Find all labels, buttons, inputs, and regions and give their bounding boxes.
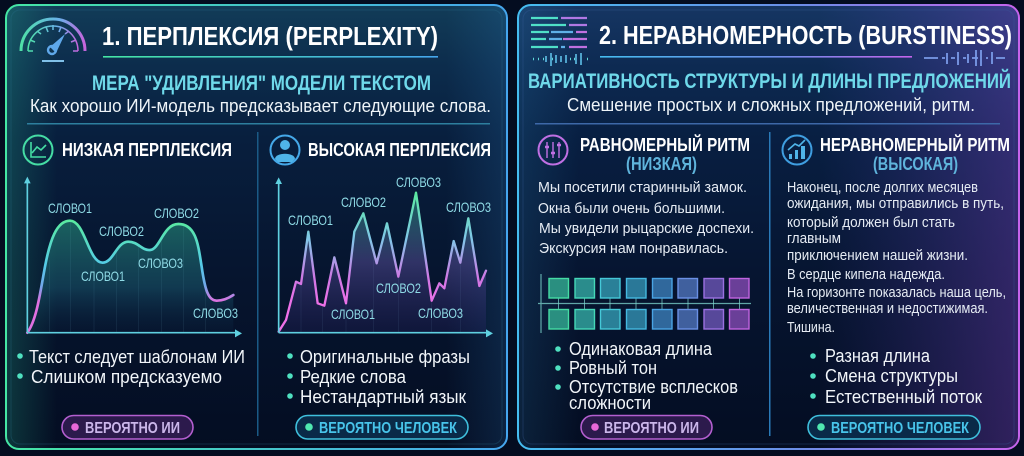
list: uneven rhythm traits: Естественный поток xyxy=(825,386,983,407)
text block: uneven rhythm sample: приключением нашей жизни. xyxy=(787,248,968,264)
chart: high perplexity spikes: СЛОВО3 xyxy=(446,199,491,215)
chart: low perplexity curve: СЛОВО3 xyxy=(193,305,238,321)
list: low perplexity traits xyxy=(17,346,245,387)
text block: even rhythm sample: Экскурсия нам понравилась. xyxy=(539,240,728,257)
chart: high perplexity spikes: СЛОВО1 xyxy=(288,212,333,228)
text block: uneven rhythm sample: который должен был стать xyxy=(787,215,955,231)
list: uneven rhythm traits: Смена структуры xyxy=(825,365,958,386)
badge: likely human: ВЕРОЯТНО ЧЕЛОВЕК xyxy=(319,420,457,437)
list: low perplexity traits: Слишком предсказуемо xyxy=(31,366,222,387)
heading: even rhythm: РАВНОМЕРНЫЙ РИТМ xyxy=(580,134,750,155)
list: uneven rhythm traits xyxy=(810,345,983,407)
description: perplexity: Как хорошо ИИ-модель предсказывает следующие слова. xyxy=(30,96,491,116)
text block: uneven rhythm sample: главным xyxy=(787,231,841,247)
text block: uneven rhythm sample: Тишина. xyxy=(787,320,835,336)
text block: even rhythm sample: Окна были очень большими. xyxy=(538,200,725,217)
chart: uniform sentence blocks xyxy=(538,274,751,333)
text block: uneven rhythm sample: В сердце кипела надежда. xyxy=(787,267,945,283)
chart: high perplexity spikes xyxy=(275,174,493,337)
chart: low perplexity curve: СЛОВО2 xyxy=(99,223,144,239)
heading: even rhythm: (НИЗКАЯ) xyxy=(626,154,697,174)
badge: likely AI: ВЕРОЯТНО ИИ xyxy=(85,420,180,437)
list: even rhythm traits xyxy=(555,338,738,413)
list: even rhythm traits: Отсутствие всплесков xyxy=(569,376,738,397)
list: even rhythm traits: сложности xyxy=(569,392,651,413)
list: high perplexity traits: Редкие слова xyxy=(300,366,407,387)
text block: even rhythm sample: Мы посетили старинный замок. xyxy=(538,179,747,196)
badge: likely human xyxy=(808,416,980,439)
heading: high perplexity: ВЫСОКАЯ ПЕРПЛЕКСИЯ xyxy=(308,140,491,160)
heading: even rhythm xyxy=(580,134,750,174)
icon: growth bars xyxy=(782,136,812,164)
icon: sliders xyxy=(538,136,568,164)
badge: likely human: ВЕРОЯТНО ЧЕЛОВЕК xyxy=(831,420,969,437)
chart: low perplexity curve xyxy=(24,177,242,337)
heading: uneven rhythm xyxy=(820,134,1010,174)
icon: high perplexity person xyxy=(270,136,300,164)
icon: text rhythm lines xyxy=(531,18,588,66)
list: uneven rhythm traits: Разная длина xyxy=(825,345,931,366)
list: low perplexity traits: Текст следует шаблонам ИИ xyxy=(29,346,245,367)
chart: high perplexity spikes: СЛОВО3 xyxy=(418,305,463,321)
chart: low perplexity curve: СЛОВО1 xyxy=(81,268,125,284)
icon: low perplexity line chart xyxy=(24,136,52,164)
subheading: perplexity: МЕРА "УДИВЛЕНИЯ" МОДЕЛИ ТЕКСТОМ xyxy=(92,72,431,95)
list: even rhythm traits: Одинаковая длина xyxy=(569,338,713,359)
text block: even rhythm sample xyxy=(538,179,754,257)
icon: speedometer gauge xyxy=(21,19,85,61)
text block: even rhythm sample: Мы увидели рыцарские доспехи. xyxy=(539,220,754,237)
heading: uneven rhythm: (ВЫСОКАЯ) xyxy=(873,154,958,174)
badge: likely AI: ВЕРОЯТНО ИИ xyxy=(604,420,699,437)
text block: uneven rhythm sample: Наконец, после долгих месяцев xyxy=(787,180,978,196)
chart: low perplexity curve: СЛОВО2 xyxy=(154,205,199,221)
chart: high perplexity spikes: СЛОВО1 xyxy=(331,306,375,322)
chart: high perplexity spikes: СЛОВО2 xyxy=(376,280,421,296)
list: high perplexity traits: Оригинальные фразы xyxy=(300,346,470,367)
text block: uneven rhythm sample: ожидания, мы отправились в путь, xyxy=(787,196,1004,212)
chart: high perplexity spikes: СЛОВО3 xyxy=(396,174,441,190)
heading: perplexity: 1. ПЕРПЛЕКСИЯ (PERPLEXITY) xyxy=(102,21,438,51)
text block: uneven rhythm sample xyxy=(787,180,1006,336)
heading: low perplexity: НИЗКАЯ ПЕРПЛЕКСИЯ xyxy=(62,140,232,160)
list: even rhythm traits: Ровный тон xyxy=(569,357,657,378)
icon: waveform xyxy=(924,50,1005,66)
badge: likely human xyxy=(296,416,468,439)
list: high perplexity traits: Нестандартный язык xyxy=(300,386,467,407)
panel: burstiness xyxy=(518,5,1019,449)
panel: perplexity xyxy=(6,5,507,449)
list: high perplexity traits xyxy=(287,346,470,407)
chart: low perplexity curve: СЛОВО1 xyxy=(48,200,92,216)
description: burstiness: Смешение простых и сложных предложений, ритм. xyxy=(567,95,975,115)
chart: high perplexity spikes: СЛОВО2 xyxy=(341,194,386,210)
chart: low perplexity curve: СЛОВО3 xyxy=(138,255,183,271)
badge: likely AI xyxy=(62,416,193,439)
badge: likely AI xyxy=(581,416,712,439)
text block: uneven rhythm sample: величественная и недостижимая. xyxy=(787,301,988,317)
